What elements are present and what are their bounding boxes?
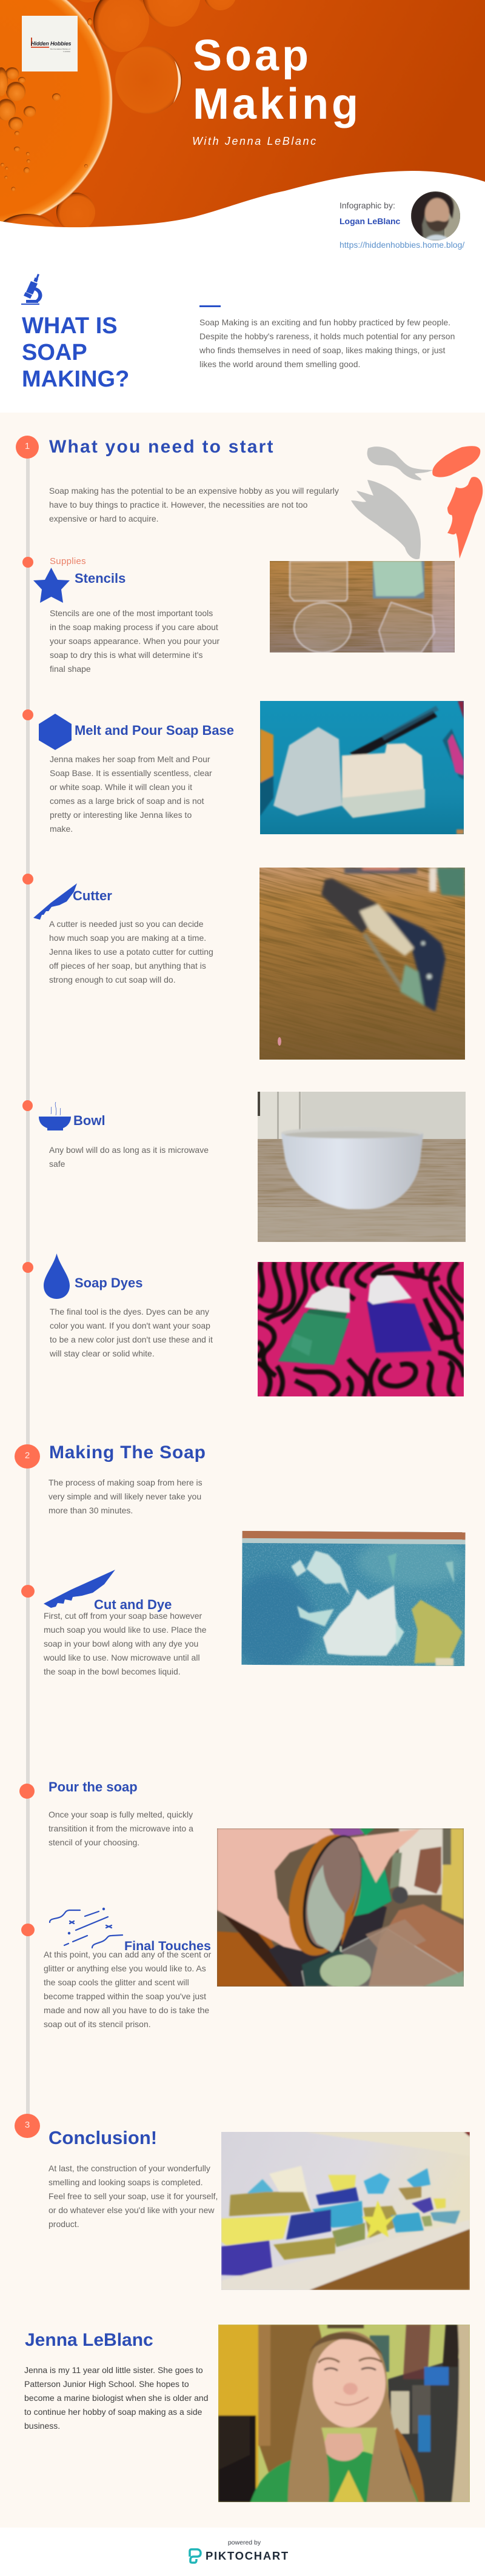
melt and pour text [50,754,212,834]
stencils text: Stencils are one of the most important tools [50,608,213,618]
heading: what you need to start: What you need to start [49,437,275,457]
icon: star [33,568,70,603]
pour text: transitition it from the microwave into a [48,1824,193,1833]
conclusion text: smelling and looking soaps is completed. [48,2177,202,2187]
bio text: Patterson Junior High School. She hopes to [24,2379,189,2389]
bio text: Jenna is my 11 year old little sister. She goes to [24,2365,203,2375]
timeline dot: pour [19,1784,35,1799]
intro paragraph [199,317,455,369]
infographic credit label: Infographic by: [340,201,395,210]
photo: plastic stencils [270,561,455,652]
blog url: https://hiddenhobbies.home.blog/ [340,240,464,250]
timeline dot: final touches [21,1924,35,1936]
cut and dye text: would like to use. Now microwave until all [44,1653,200,1662]
step 1 marker: 1 [25,441,30,451]
footer credit: powered by: powered by [228,2539,261,2546]
cut and dye text: much soap you would like to use. Place the [44,1625,206,1635]
supplies label: Supplies [50,556,86,566]
icon: knife large [44,1570,115,1608]
intro paragraph: Soap Making is an exciting and fun hobby practiced by few people. [199,317,450,327]
timeline dot: dyes [22,1262,33,1273]
icon: hexagon [39,714,72,750]
section 1 intro text: have to buy things to practice it. However, the necessities are not too [49,500,307,510]
heading: stencils: Stencils [75,571,125,586]
cut and dye text: First, cut off from your soap base however [44,1611,202,1621]
final touches text: glitter or anything else you would like to. As [44,1964,206,1973]
section 1 intro text: Soap making has the potential to be an expensive hobby as you will regularly [49,486,339,496]
melt and pour text: pretty or interesting like Jenna likes to [50,810,192,820]
stencils text [50,608,219,674]
heading: bowl: Bowl [73,1113,105,1128]
decorative brush strokes [351,446,483,559]
conclusion text: or do whatever else you'd like with your new [48,2205,214,2215]
icon: knife [33,883,77,920]
timeline dot: cut and dye [21,1585,35,1598]
conclusion text [48,2163,218,2229]
stencils text: your soaps appearance. When you pour your [50,636,219,646]
final touches text [44,1950,211,2029]
dyes text: will stay clear or solid white. [50,1349,155,1358]
bio text: become a marine biologist when she is older and [24,2393,209,2403]
bio text [24,2365,209,2431]
section 1 intro text [49,486,339,523]
step 3 marker [15,2114,40,2138]
melt and pour text: Jenna makes her soap from Melt and Pour [50,754,210,764]
heading: what is soap making [22,313,129,392]
section 1 intro text: expensive or hard to acquire. [49,514,159,523]
bio text: business. [24,2421,60,2431]
cut and dye text: the soap in the bowl becomes liquid. [44,1667,181,1676]
footer logo: piktochart: PIKTOCHART [206,2549,289,2562]
heading: what is soap making: MAKING? [22,367,129,392]
conclusion text: product. [48,2219,79,2229]
heading: making the soap: Making The Soap [49,1442,206,1462]
step 2 marker: 2 [25,1450,30,1461]
photo: finished soaps [221,2132,470,2290]
logo: Hidden Hobbies: Hidden Hobbies [31,41,71,47]
cutter text: Jenna likes to use a potato cutter for cutting [49,947,213,957]
icon: droplet [44,1253,70,1299]
icon: bowl [39,1102,71,1130]
author name: Logan LeBlanc [340,216,400,226]
heading: cut and dye: Cut and Dye [94,1597,172,1612]
white wave [0,171,485,242]
heading: what is soap making: SOAP [22,340,87,365]
title: Making [193,80,361,128]
photo: portrait of Jenna [218,2325,470,2502]
title: Soap [193,32,312,80]
timeline dot: cutter [22,874,33,885]
heading: melt and pour soap base: Melt and Pour Soap Base [75,723,234,738]
cut and dye text: soap in your bowl along with any dye you [44,1639,198,1648]
photo: soap base bricks [260,701,464,834]
timeline [25,448,29,2126]
pour text [48,1810,193,1847]
accent dash [199,305,221,307]
section 2 intro text: The process of making soap from here is [48,1478,202,1487]
photo: white bowl [258,1092,466,1242]
cutter text: strong enough to cut soap will do. [49,975,176,984]
stencils text: soap to dry this is what will determine it's [50,650,202,660]
photo: potato cutter [259,868,465,1060]
cut and dye text [44,1611,206,1676]
photo: dye bottles on zebra tape [258,1262,464,1396]
final touches text: made and now all you have to do is take the [44,2005,209,2015]
intro paragraph: Despite the hobby's rareness, it holds much potential for any person [199,331,455,341]
header banner: orange soap bubbles [0,0,485,228]
final touches text: the soap cools the glitter and scent will [44,1977,189,1987]
subtitle: With Jenna LeBlanc [192,135,318,147]
section 2 intro text: more than 30 minutes. [48,1505,133,1515]
icon: microscope [21,274,42,305]
timeline dot: bowl [22,1100,33,1111]
heading: pour the soap: Pour the soap [48,1779,138,1794]
step 1 marker [16,436,39,459]
heading: what is soap making: WHAT IS [22,313,118,339]
icon: glitter squiggles [48,1907,124,1948]
photo: cut soap in blue mold [241,1530,466,1666]
logo: Hidden Hobbies: The Uncommon Hobbies of Louisiana [50,48,70,53]
melt and pour text: or white soap. While it will clean you it [50,782,192,792]
heading: conclusion: Conclusion! [48,2127,157,2148]
pour text: stencil of your choosing. [48,1837,139,1847]
footer logo: piktochart [189,2548,289,2564]
dyes text: The final tool is the dyes. Dyes can be any [50,1307,209,1316]
stencils text: in the soap making process if you care about [50,622,218,632]
cutter text: A cutter is needed just so you can decide [49,919,204,929]
pour text: Once your soap is fully melted, quickly [48,1810,193,1819]
cutter text [49,919,213,984]
bowl text: Any bowl will do as long as it is microwave [49,1145,209,1155]
melt and pour text: make. [50,824,73,834]
heading: cutter: Cutter [73,888,112,903]
logo: Hidden Hobbies [22,16,78,71]
bowl text [49,1145,209,1169]
section 2 intro text [48,1478,202,1515]
final touches text: become trapped within the soap you've just [44,1991,206,2001]
section 2 intro text: very simple and will likely never take you [48,1492,201,1501]
final touches text: At this point, you can add any of the scent or [44,1950,211,1959]
melt and pour text: comes as a large brick of soap and is not [50,796,204,806]
heading: jenna leblanc: Jenna LeBlanc [25,2330,153,2350]
conclusion text: Feel free to sell your soap, use it for yourself, [48,2191,218,2201]
heading: soap dyes: Soap Dyes [75,1275,143,1290]
heading: final touches: Final Touches [124,1939,211,1953]
bowl text: safe [49,1159,65,1169]
cutter text: off pieces of her soap, but anything that is [49,961,206,971]
timeline dot: stencils [22,557,33,568]
author portrait [411,191,460,241]
stencils text: final shape [50,664,91,674]
conclusion text: At last, the construction of your wonderfully [48,2163,210,2173]
timeline dot: melt and pour [22,709,33,720]
dyes text: color you want. If you don't want your soap [50,1321,210,1330]
bio text: to continue her hobby of soap making as a side [24,2407,202,2417]
title [193,32,361,128]
step 2 marker [15,1444,40,1469]
dyes text [50,1307,213,1358]
melt and pour text: Soap Base. It is essentially scentless, clear [50,768,212,778]
photo: pouring soap [217,1828,464,1987]
intro paragraph: who finds themselves in need of soap, likes making things, or just [199,345,445,355]
step 3 marker: 3 [25,2120,30,2130]
intro paragraph: likes the world around them smelling good. [199,359,360,369]
final touches text: soap out of its stencil prison. [44,2019,151,2029]
cutter text: how much soap you are making at a time. [49,933,206,943]
dyes text: to be a new color just don't use these and it [50,1335,213,1344]
